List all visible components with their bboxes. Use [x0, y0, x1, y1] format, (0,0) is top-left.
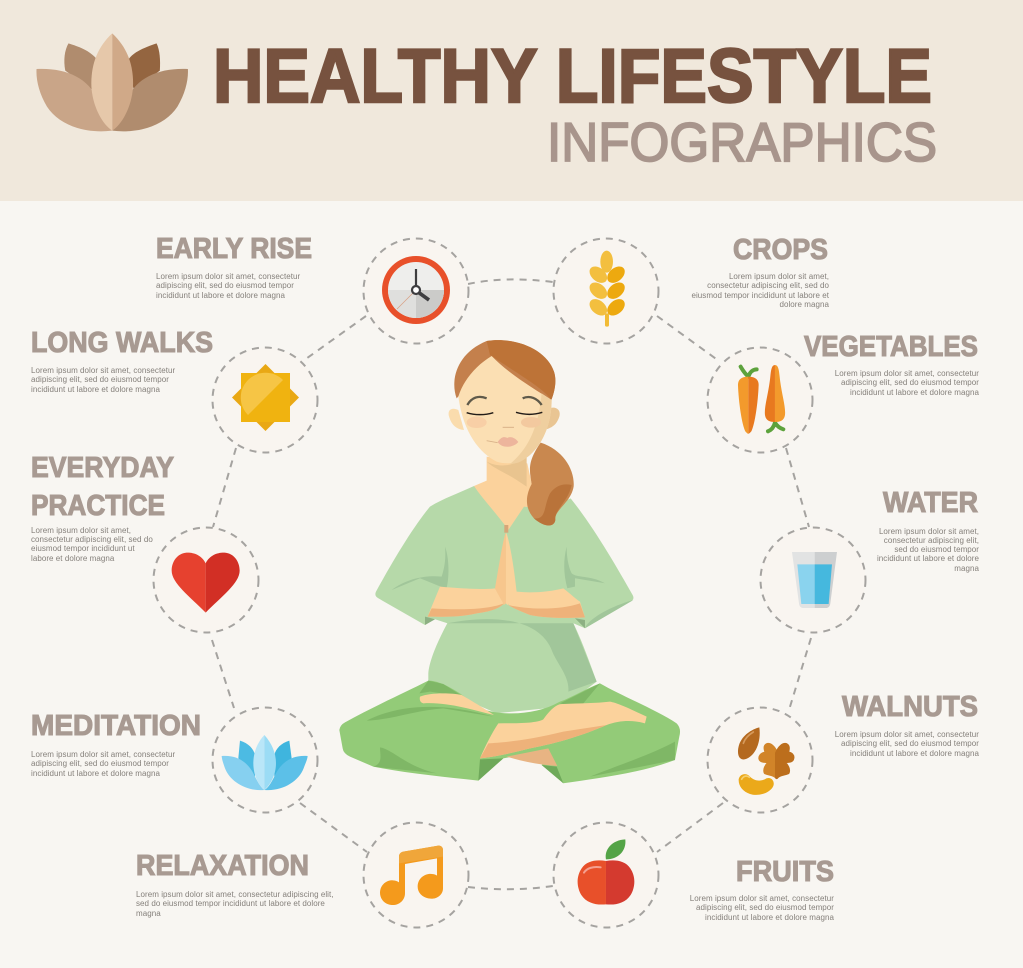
figure: praying hands and forearms: [428, 525, 585, 618]
icon circle: heart: [154, 528, 258, 632]
label: fruits: adipiscing elit, sed do eiusmod tempor: [696, 903, 834, 912]
label: early rise: adipiscing elit, sed do eiusmod tempor: [156, 281, 294, 290]
icon circle: lotus: [212, 708, 318, 812]
label: vegetables: [804, 331, 979, 397]
figure: pants and legs: [339, 681, 680, 783]
label: everyday practice: PRACTICE: [31, 490, 165, 522]
label: long walks: [31, 327, 213, 394]
label: water: [877, 487, 979, 573]
label: water: magna: [954, 564, 979, 573]
label: crops: eiusmod tempor incididunt ut labore et: [691, 291, 830, 300]
figure: neck and chest: [474, 457, 537, 538]
icon: header lotus: [36, 33, 188, 131]
label: meditation: Lorem ipsum dolor sit amet, consectetur: [31, 750, 176, 759]
label: everyday practice: eiusmod tempor incididunt ut: [31, 544, 135, 553]
label: water: WATER: [883, 487, 978, 519]
label: long walks: adipiscing elit, sed do eiusmod tempor: [31, 375, 169, 384]
label: everyday practice: labore et dolore magna: [31, 554, 115, 563]
label: walnuts: WALNUTS: [842, 691, 978, 723]
label: meditation: adipiscing elit, sed do eiusmod tempor: [31, 759, 169, 768]
label: crops: Lorem ipsum dolor sit amet,: [729, 272, 829, 281]
label: long walks: Lorem ipsum dolor sit amet, consectetur: [31, 366, 176, 375]
label: meditation: [31, 710, 201, 778]
label: early rise: EARLY RISE: [156, 233, 312, 265]
dashed connectors: [212, 279, 811, 889]
label: meditation: MEDITATION: [31, 710, 201, 742]
label: vegetables: Lorem ipsum dolor sit amet, consectetur: [835, 369, 979, 378]
figure: head and face: [449, 340, 560, 464]
label: relaxation: Lorem ipsum dolor sit amet, consectetur adipiscing elit,: [136, 890, 334, 899]
label: fruits: incididunt ut labore et dolore magna: [705, 913, 834, 922]
label: walnuts: incididunt ut labore et dolore magna: [850, 749, 979, 758]
label: walnuts: adipiscing elit, sed do eiusmod tempor: [841, 739, 979, 748]
label: water: consectetur adipiscing elit,: [884, 536, 979, 545]
icon circle: sun: [212, 348, 318, 452]
label: relaxation: RELAXATION: [136, 850, 309, 882]
figure: blouse: [375, 486, 633, 713]
label: long walks: LONG WALKS: [31, 327, 213, 359]
label: vegetables: VEGETABLES: [804, 331, 978, 363]
label: water: sed do eiusmod tempor: [894, 545, 979, 554]
figure: ponytail: [527, 443, 574, 525]
icon circle: nuts: [708, 708, 812, 812]
label: everyday practice: EVERYDAY: [31, 452, 174, 484]
label: water: Lorem ipsum dolor sit amet,: [879, 527, 979, 536]
panel: header band: [0, 0, 1023, 201]
label: fruits: FRUITS: [736, 856, 834, 888]
icon circle: music note: [364, 822, 468, 928]
label: vegetables: adipiscing elit, sed do eiusmod tempor: [841, 378, 979, 387]
label: crops: dolore magna: [779, 300, 829, 309]
label: fruits: [690, 856, 834, 922]
label: everyday practice: consectetur adipiscing elit, sed do: [31, 535, 153, 544]
label: relaxation: sed do eiusmod tempor incididunt ut labore et dolore: [136, 899, 325, 908]
icon circle: carrots: [708, 348, 812, 452]
title: HEALTHY LIFESTYLE: [213, 34, 932, 119]
label: fruits: Lorem ipsum dolor sit amet, consectetur: [690, 894, 834, 903]
icon circle: wheat: [554, 238, 658, 344]
label: early rise: Lorem ipsum dolor sit amet, consectetur: [156, 272, 301, 281]
label: early rise: incididunt ut labore et dolore magna: [156, 291, 285, 300]
label: crops: consectetur adipiscing elit, sed do: [707, 281, 829, 290]
label: relaxation: magna: [136, 909, 161, 918]
label: everyday practice: Lorem ipsum dolor sit amet,: [31, 526, 131, 535]
label: meditation: incididunt ut labore et dolore magna: [31, 769, 160, 778]
subtitle: INFOGRAPHICS: [547, 111, 937, 173]
label: walnuts: [835, 691, 979, 758]
label: vegetables: incididunt ut labore et dolore magna: [850, 388, 979, 397]
icon circle: apple: [554, 822, 658, 928]
icon circle: water glass: [760, 528, 866, 632]
label: water: incididunt ut labore et dolore: [877, 554, 979, 563]
label: relaxation: [136, 850, 334, 918]
label: long walks: incididunt ut labore et dolore magna: [31, 385, 160, 394]
label: early rise: [156, 233, 312, 300]
icon circle: clock: [364, 238, 468, 344]
label: walnuts: Lorem ipsum dolor sit amet, consectetur: [835, 730, 979, 739]
label: crops: [691, 234, 830, 309]
label: crops: CROPS: [733, 234, 828, 266]
label: everyday practice: [31, 452, 174, 563]
woman figure in lotus pose: [339, 340, 680, 783]
